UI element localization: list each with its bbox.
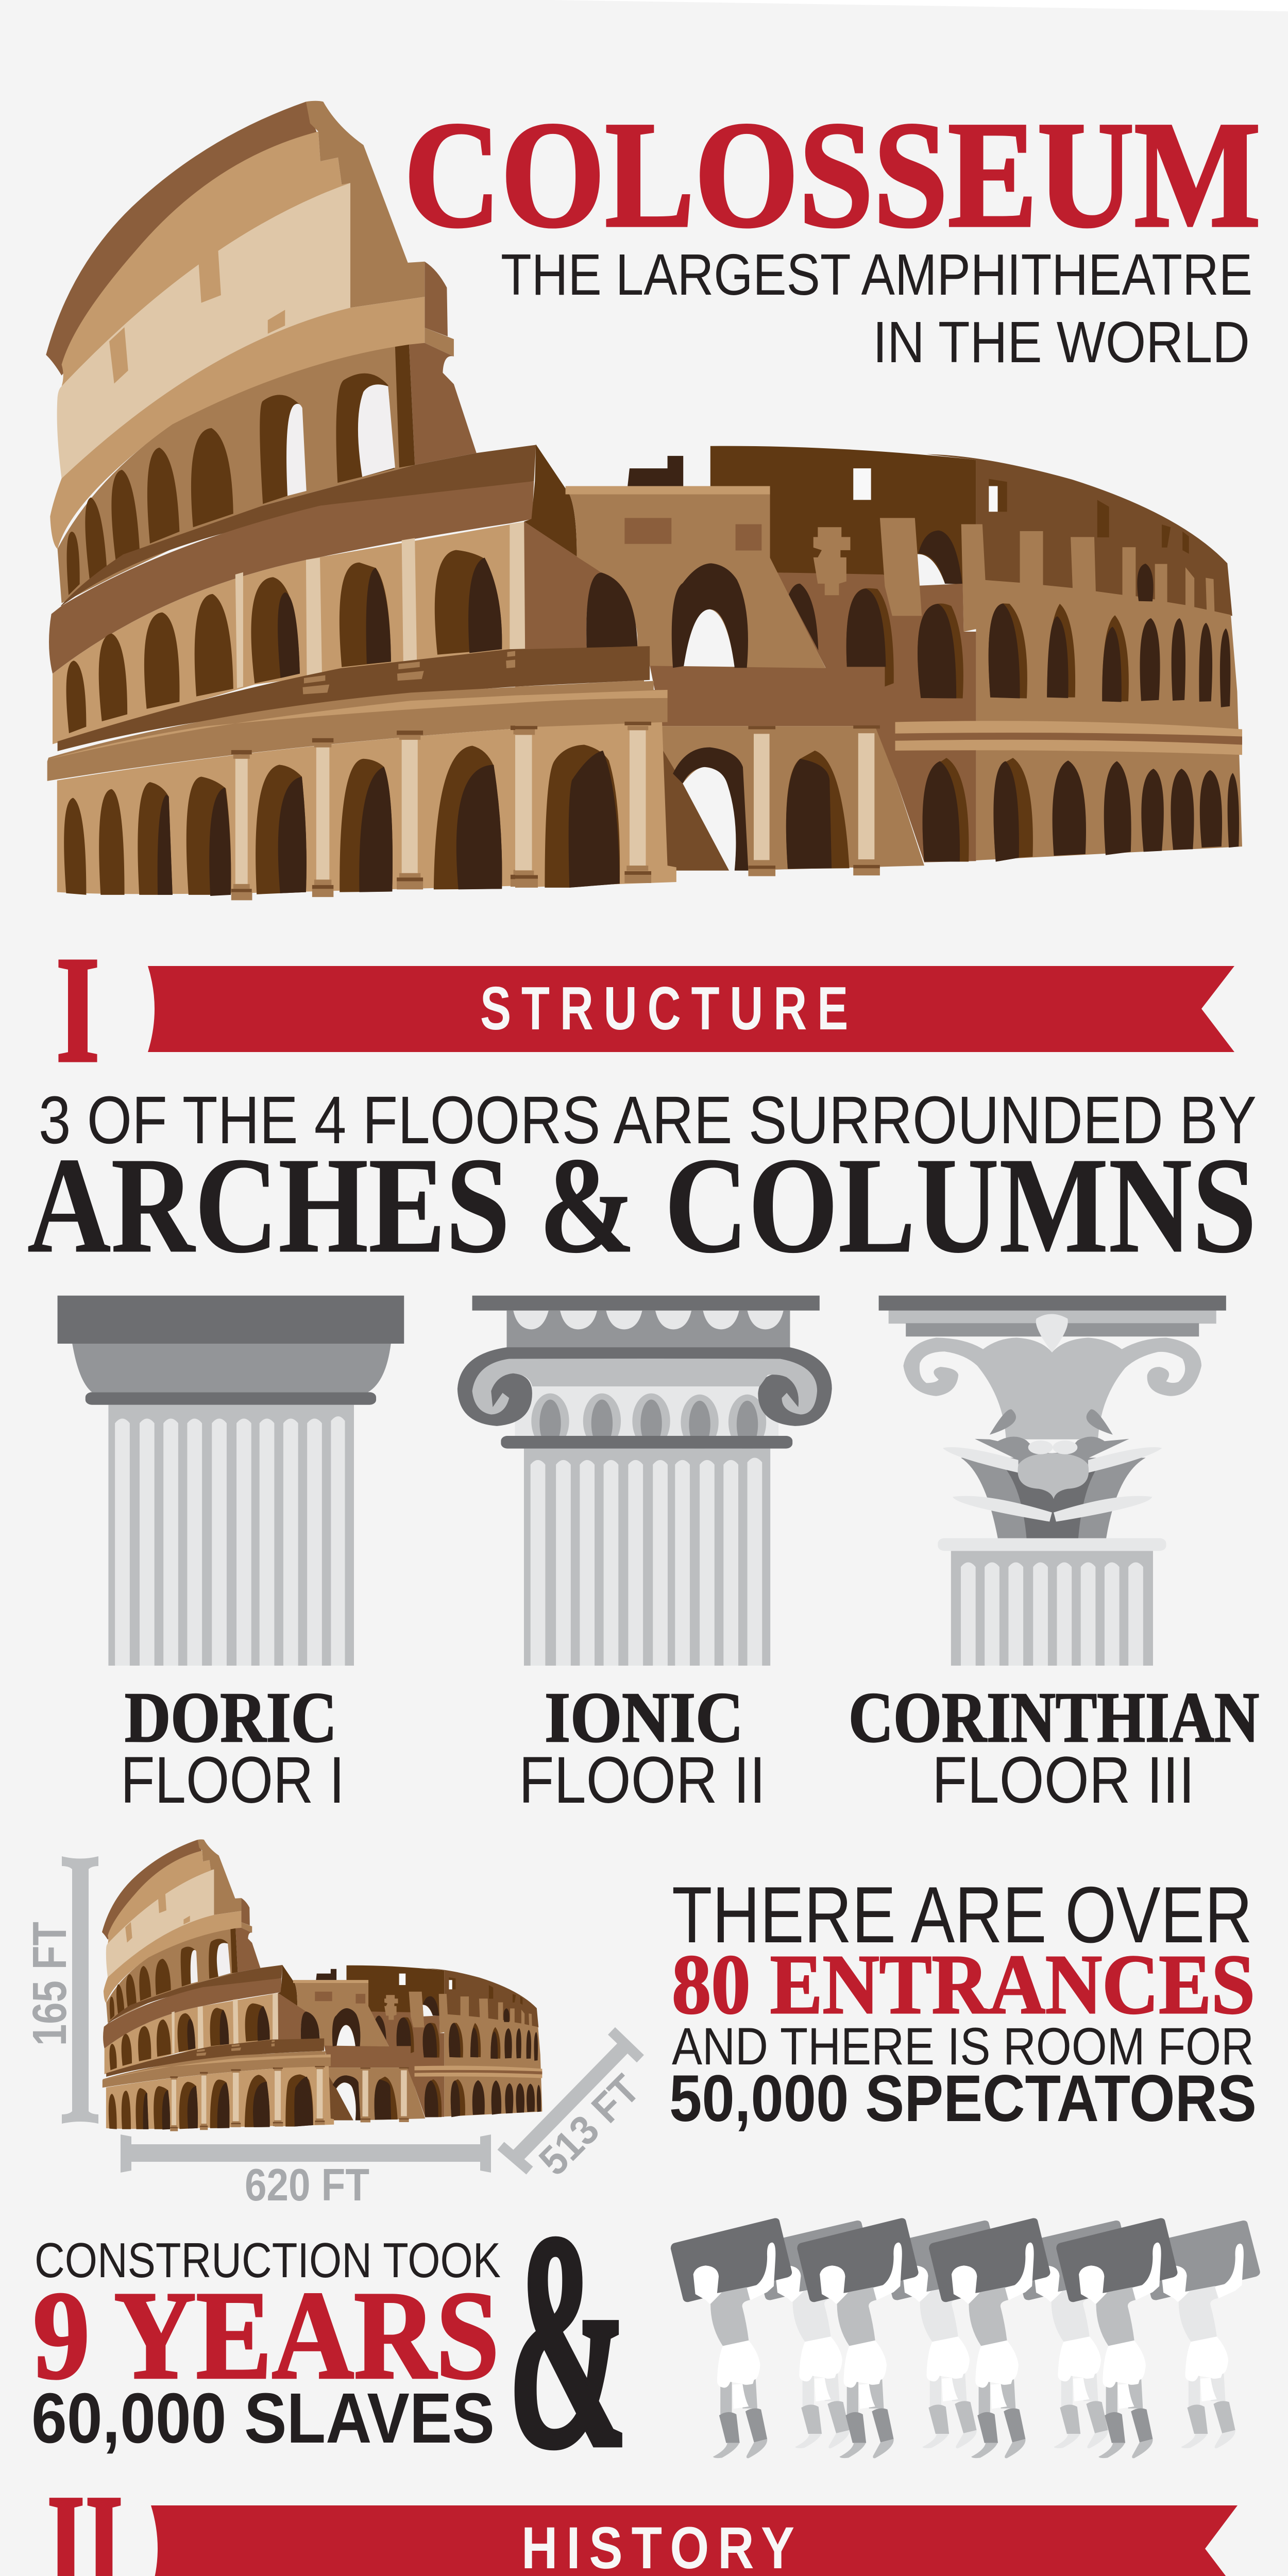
dimension: height [23,1856,98,2124]
text block: construction [31,2233,501,2458]
label: doric: DORIC [125,1678,337,1757]
column: doric [58,1296,404,1666]
label: ionic: IONIC [545,1678,743,1757]
banner: structure [148,966,1234,1052]
text block: entrances [669,1870,1257,2136]
text block: construction: 60,000 SLAVES [31,2379,495,2458]
dimension: height: 165 FT [23,1922,76,2046]
column: corinthian [879,1296,1226,1666]
banner: structure: STRUCTURE [480,974,858,1043]
text block: construction: CONSTRUCTION TOOK [35,2233,501,2288]
dimension: length: 620 FT [245,2159,369,2210]
label: doric [121,1678,345,1817]
column: ionic [457,1296,832,1666]
label: corinthian: FLOOR III [932,1743,1195,1817]
label: corinthian [849,1678,1259,1817]
subtitle: IN THE WORLD [873,310,1250,375]
text block: entrances: 80 ENTRANCES [672,1937,1255,2031]
text: & [507,2169,628,2512]
section numeral I: I [56,925,100,1094]
illustration: small colosseum [102,1839,542,2131]
dimension: width: 513 FT [530,2066,648,2184]
label: ionic [519,1678,766,1817]
label: ionic: FLOOR II [519,1743,766,1817]
text block: construction: 9 YEARS [33,2265,499,2405]
illustration: colosseum [46,101,1242,900]
subtitle [501,242,1252,375]
dimension: width [501,2031,648,2184]
dimension: length [121,2134,491,2210]
banner: history [151,2505,1238,2576]
illustration: slaves carrying blocks [671,2218,1260,2458]
label: doric: FLOOR I [121,1743,345,1817]
